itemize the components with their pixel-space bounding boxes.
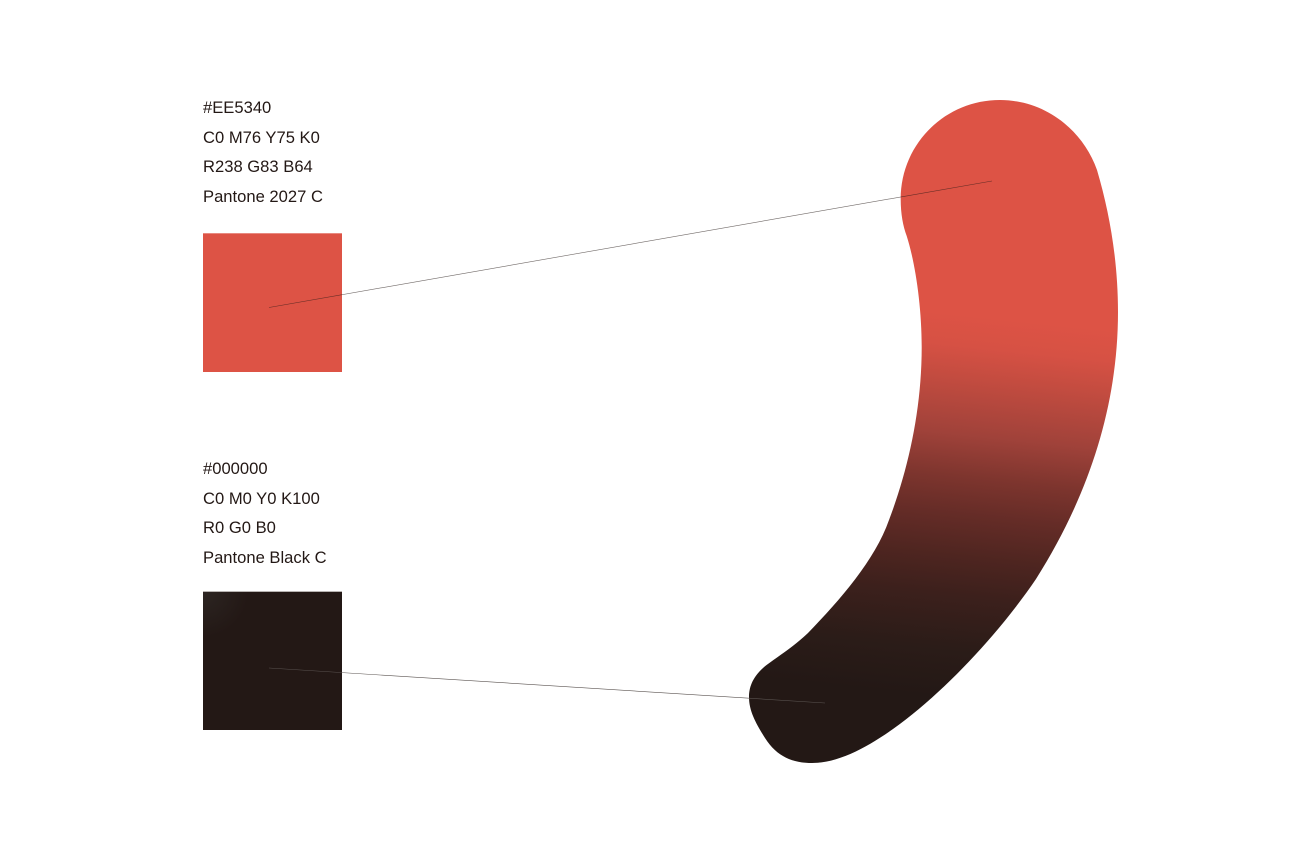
- connector line: red: [269, 181, 992, 308]
- text block: red colour specs: C0 M76 Y75 K0: [203, 128, 320, 146]
- text block: red colour specs: #EE5340: [203, 98, 271, 117]
- text block: black colour specs: R0 G0 B0: [203, 518, 276, 537]
- text block: red colour specs: Pantone 2027 C: [203, 186, 323, 206]
- text block: red colour specs: R238 G83 B64: [203, 157, 313, 176]
- text block: black colour specs: Pantone Black C: [203, 548, 327, 566]
- text block: black colour specs: #000000: [203, 459, 268, 478]
- text block: black colour specs: C0 M0 Y0 K100: [203, 488, 320, 508]
- swatch: red: [203, 233, 342, 372]
- text block: black colour specs: [203, 459, 327, 566]
- curved gradient brush stroke: [749, 100, 1118, 763]
- swatch: black: [203, 591, 342, 730]
- text block: red colour specs: [203, 98, 323, 206]
- connector line: black: [269, 668, 825, 703]
